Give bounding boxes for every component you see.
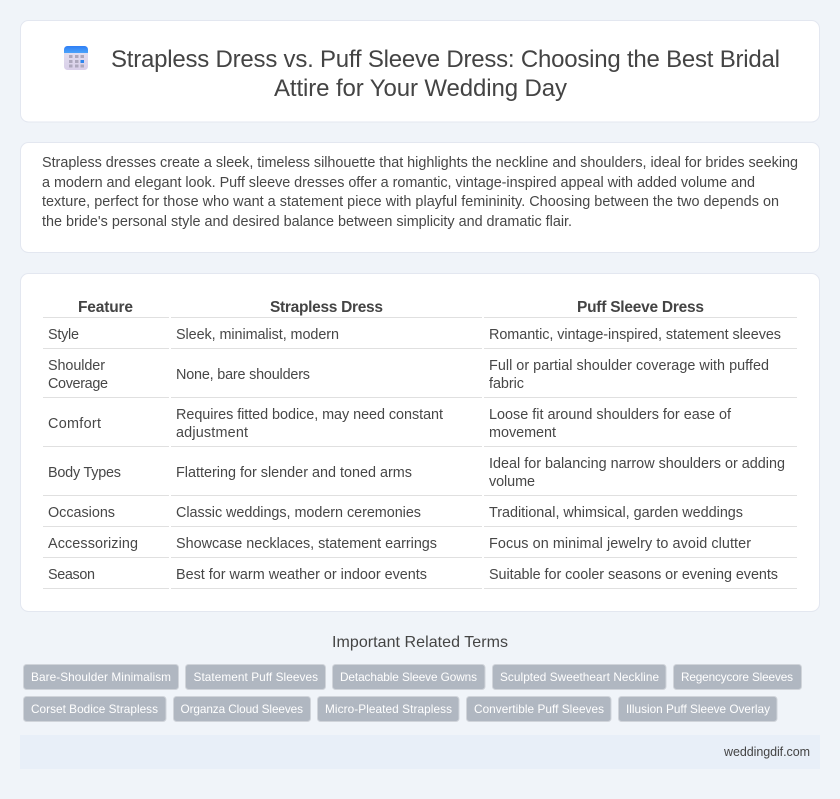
icon: calendar [64,46,88,70]
row: shoulder coverage: None, bare shoulders [176,367,310,383]
tag [466,696,611,722]
row: shoulder coverage: Full or partial shoulder coverage with puffed [489,358,769,374]
text block: introduction paragraph: Strapless dresses create a sleek, timeless silhouette that highlights the neckline and shoulders, ideal for brides seeking [42,155,798,171]
row: occasions: Traditional, whimsical, garden weddings [489,505,743,521]
row: comfort: Loose fit around shoulders for ease of [489,407,732,423]
row: season [48,567,778,583]
heading: important related terms: Important Related Terms [332,634,508,651]
title: Strapless Dress vs. Puff Sleeve Dress: Choosing the Best Bridal [111,46,780,73]
row: comfort: movement [489,425,556,441]
text block: introduction paragraph: texture, perfect for those who want a statement piece with playful femininity. Choosing between the two depends on [42,194,779,210]
text block: introduction paragraph: the bride's personal style and desired balance between simplicity and dramatic flair. [42,214,572,230]
row: comfort: Comfort [48,416,101,432]
tag [318,696,459,722]
tag [24,664,178,690]
table header row: Strapless Dress [270,299,383,316]
row: season: Best for warm weather or indoor events [176,567,427,583]
table header row: Feature [78,299,133,316]
tag [332,664,485,690]
tag: Illusion Puff Sleeve Overlay [626,702,770,716]
row: comfort: adjustment [176,425,248,441]
tag [186,664,326,690]
row: body types [48,456,785,490]
row: body types: volume [489,474,535,490]
table header row: Puff Sleeve Dress [577,299,704,316]
text block: introduction paragraph: a modern and elegant look. Puff sleeve dresses offer a romantic, vintage-inspired appeal with added volume and [42,175,755,191]
row: shoulder coverage [48,358,769,392]
panel: introduction [20,142,820,252]
tag: Organza Cloud Sleeves [180,702,303,716]
tag: Micro-Pleated Strapless [325,702,452,716]
title: Attire for Your Wedding Day [274,75,567,102]
row: style: Style [48,327,79,343]
row: shoulder coverage: Shoulder [48,358,105,374]
tag [618,696,777,722]
row: accessorizing: Focus on minimal jewelry to avoid clutter [489,536,751,552]
row: body types: Body Types [48,465,121,481]
footer: source: weddingdif.com [723,745,810,759]
footer bar [20,735,820,769]
row: body types: Flattering for slender and toned arms [176,465,412,481]
tag: Sculpted Sweetheart Neckline [500,670,659,684]
row: comfort: Requires fitted bodice, may need constant [176,407,443,423]
row: comfort [48,407,732,441]
row: shoulder coverage: fabric [489,376,524,392]
tag: Convertible Puff Sleeves [474,702,604,716]
panel: comparison table [20,274,820,612]
row: body types: Ideal for balancing narrow shoulders or adding [489,456,785,472]
tag [174,696,310,722]
row: style: Romantic, vintage-inspired, statement sleeves [489,327,781,343]
title [111,46,780,102]
text block: introduction paragraph [42,155,798,230]
tag [492,664,666,690]
row: style: Sleek, minimalist, modern [176,327,339,343]
tag: Detachable Sleeve Gowns [340,670,477,684]
row: accessorizing: Accessorizing [48,536,138,552]
row: accessorizing [48,536,751,552]
row: occasions: Occasions [48,505,115,521]
row: occasions: Classic weddings, modern ceremonies [176,505,421,521]
row: style [48,327,781,343]
row: shoulder coverage: Coverage [48,376,108,392]
tag [674,664,802,690]
tags: related terms [24,664,802,722]
table header row [78,299,704,316]
tag: Statement Puff Sleeves [194,670,318,684]
tag: Bare-Shoulder Minimalism [31,670,171,684]
tag: Regencycore Sleeves [681,670,793,684]
row: season: Season [48,567,95,583]
row: occasions [48,505,743,521]
panel: title header [20,20,820,122]
tag: Corset Bodice Strapless [31,702,158,716]
tag [24,696,166,722]
row: season: Suitable for cooler seasons or evening events [489,567,778,583]
row: accessorizing: Showcase necklaces, statement earrings [176,536,437,552]
